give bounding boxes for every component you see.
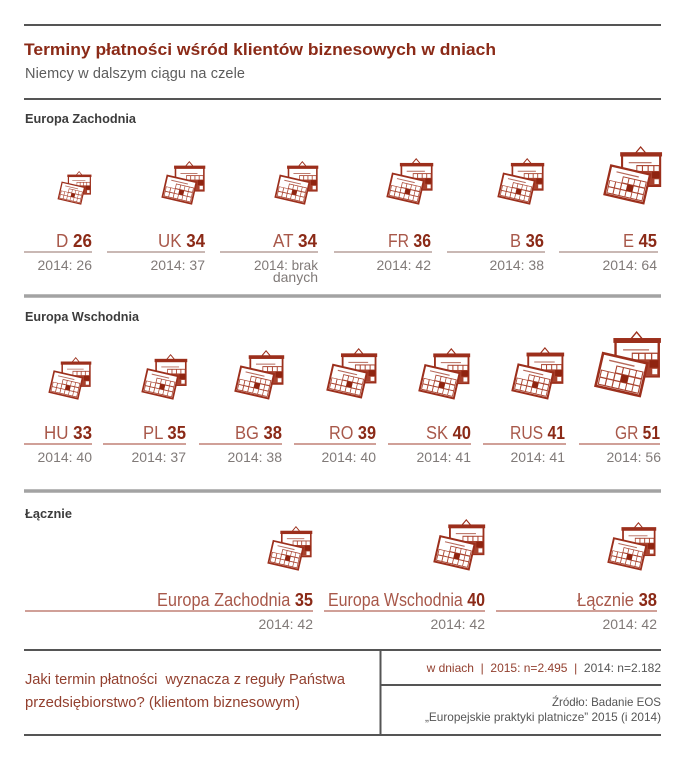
item: HU	[24, 358, 92, 465]
item: Europa Wschodnia: Europa Wschodnia 40	[328, 590, 485, 610]
item: PL: PL 35	[143, 423, 186, 443]
panel: Europa Zachodnia	[24, 147, 662, 285]
panel: Łącznie	[25, 520, 657, 632]
item: RUS	[483, 348, 566, 465]
item: PL	[103, 355, 187, 465]
item: Łącznie	[496, 523, 657, 632]
item: RUS: RUS 41	[510, 423, 565, 443]
item: E	[559, 147, 662, 273]
item: GR: GR 51	[615, 423, 660, 443]
item: B: 2014: 38	[490, 257, 544, 273]
item: BG: 2014: 38	[228, 449, 282, 465]
item: Łącznie: 2014: 42	[602, 616, 657, 632]
item: B	[447, 159, 545, 273]
item: UK	[107, 162, 205, 273]
question text: Jaki termin płatności wyznacza z reguły Państwa	[25, 672, 346, 688]
item: HU: 2014: 40	[38, 449, 92, 465]
source	[425, 694, 661, 724]
section heading: Łącznie: Łącznie	[25, 506, 72, 521]
sample sizes: w dniach | 2015: n=2.495 | 2014: n=2.182	[426, 661, 661, 675]
item: Łącznie: Łącznie 38	[577, 590, 657, 610]
item: Europa Zachodnia: 2014: 42	[258, 616, 313, 632]
item: PL: 2014: 37	[132, 449, 186, 465]
item: Europa Wschodnia	[324, 520, 485, 632]
item: RUS: 2014: 41	[510, 449, 565, 465]
item: Europa Zachodnia	[25, 527, 313, 632]
item: GR: 2014: 56	[606, 449, 661, 465]
item: RO	[294, 349, 377, 465]
item: AT	[220, 162, 319, 285]
panel: Europa Wschodnia	[24, 332, 661, 465]
item: D: 2014: 26	[38, 257, 92, 273]
source: Źródło: Badanie EOS	[552, 694, 661, 709]
section heading: Europa Wschodnia: Europa Wschodnia	[25, 309, 140, 324]
item: Europa Zachodnia: Europa Zachodnia 35	[157, 590, 313, 610]
item: FR	[334, 159, 433, 273]
item: SK	[388, 349, 471, 465]
item: GR	[579, 332, 661, 465]
title: Terminy płatności wśród klientów biznesowych w dniach	[24, 40, 496, 59]
subtitle: Niemcy w dalszym ciągu na czele	[25, 66, 245, 82]
section heading: Europa Zachodnia: Europa Zachodnia	[25, 111, 137, 126]
item: B: B 36	[510, 231, 544, 251]
item: FR: 2014: 42	[376, 257, 431, 273]
source: „Europejskie praktyki platnicze” 2015 (i 2014)	[425, 710, 661, 724]
question text	[25, 672, 346, 711]
question text: przedsiębiorstwo? (klientom biznesowym)	[25, 695, 300, 711]
item: AT: AT 34	[273, 231, 317, 251]
item: UK: UK 34	[158, 231, 205, 251]
item: D: D 26	[56, 231, 92, 251]
item: BG: BG 38	[235, 423, 282, 443]
item: SK: SK 40	[426, 423, 471, 443]
item: E: 2014: 64	[602, 257, 657, 273]
item: AT: 2014: brak	[254, 257, 319, 273]
item: D	[24, 172, 92, 273]
item: HU: HU 33	[44, 423, 92, 443]
item: RO: 2014: 40	[322, 449, 376, 465]
item: BG	[199, 351, 284, 465]
item: Europa Wschodnia: 2014: 42	[430, 616, 485, 632]
item: AT: danych	[273, 269, 318, 285]
item: SK: 2014: 41	[416, 449, 471, 465]
item: FR: FR 36	[388, 231, 431, 251]
item: UK: 2014: 37	[150, 257, 205, 273]
item: E: E 45	[623, 231, 657, 251]
item: RO: RO 39	[329, 423, 376, 443]
